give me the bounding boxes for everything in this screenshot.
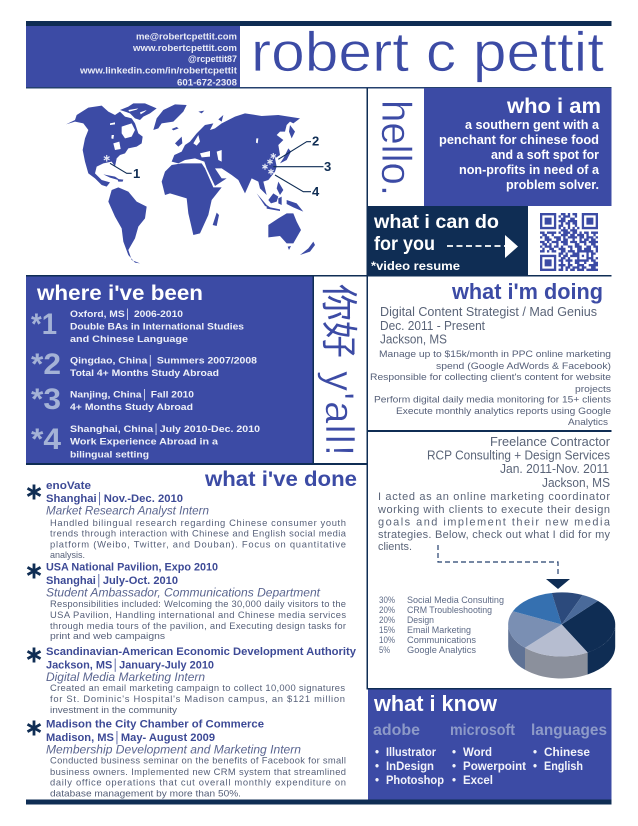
heading: where i've been	[36, 282, 203, 305]
entry: enoVate: Handled bilingual research regarding Chinese consumer youth	[50, 517, 346, 528]
heading	[373, 212, 499, 255]
bio text	[439, 118, 600, 192]
responsibilities: Analytics	[568, 416, 608, 427]
bio text: a southern gent with a	[465, 118, 600, 132]
skill column: microsoft: •	[452, 775, 456, 787]
stop 1: and Chinese Language	[70, 334, 188, 345]
vertical greeting: y'all!	[317, 371, 361, 456]
entry: USA National Pavilion: USA Pavilion, Handling international and Chinese media services	[50, 609, 346, 620]
skill column: languages: English	[544, 761, 583, 773]
skill column: adobe	[373, 722, 444, 787]
vertical greeting: 你好	[318, 284, 359, 358]
entry: enoVate: analysis.	[50, 549, 85, 560]
video resume note: *video resume	[371, 259, 460, 273]
dashed connector arrow	[438, 545, 570, 589]
entry: Madison Chamber	[28, 718, 346, 798]
skill column: microsoft: Powerpoint	[463, 761, 526, 773]
stop 2: Qingdao, China│ Summers 2007/2008	[70, 354, 257, 366]
pie legend: 10%	[379, 635, 395, 645]
contact lines: 601-672-2308	[177, 78, 237, 88]
entry: Madison Chamber: Madison the City Chamber of Commerce	[46, 718, 264, 730]
pie legend	[379, 595, 504, 655]
entry: Scandinavian-American: Digital Media Marketing Intern	[46, 672, 205, 684]
entry: USA National Pavilion: Student Ambassador, Communications Department	[46, 588, 321, 600]
entry: Scandinavian-American: for St. Dominic's Hospital's Madison campus, an $121 million	[50, 693, 345, 704]
bio text: penchant for chinese food	[439, 133, 599, 147]
pie legend: 5%	[379, 645, 390, 655]
entry: Madison Chamber: business owners. Implemented new CRM system that streamlined	[50, 766, 346, 777]
eurasia, africa and oceania	[162, 111, 315, 255]
skill column: microsoft: •	[452, 747, 456, 759]
stop 1: Oxford, MS│ 2006-2010	[70, 308, 183, 320]
role: Jackson, MS	[380, 332, 447, 346]
contact lines	[79, 32, 238, 88]
bio text: non-profits in need of a	[459, 163, 600, 177]
QR code	[540, 214, 598, 270]
pie legend: 20%	[379, 615, 395, 625]
stop 3: *3	[31, 383, 61, 416]
skill column: languages: Chinese	[544, 747, 590, 759]
heading: what i'm doing	[451, 279, 603, 304]
panel: what i can do	[368, 206, 528, 275]
responsibilities: Execute monthly analytics reports using Google	[396, 405, 611, 416]
responsibilities: Responsible for collecting client's content for website	[370, 371, 611, 382]
contact lines: www.robertcpettit.com	[132, 43, 237, 54]
entry: Madison Chamber: Madison, MS│May- August 2009	[46, 730, 215, 745]
role	[380, 305, 597, 346]
pie legend: CRM Troubleshooting	[407, 605, 492, 615]
heading: what i can do	[373, 212, 499, 233]
skill column: adobe: Illustrator	[386, 747, 436, 759]
entry: USA National Pavilion: through media tours of the pavilion, and Executing design tasks for	[50, 620, 346, 631]
location stars	[104, 153, 276, 175]
title: robert c pettit	[251, 20, 604, 83]
role: Jan. 2011-Nov. 2011	[500, 462, 609, 476]
heading: what i know	[373, 691, 498, 716]
panel: what i know	[368, 690, 612, 800]
leader lines and numbers: 4	[312, 184, 320, 199]
pie legend: Social Media Consulting	[407, 595, 504, 605]
entry: enoVate: enoVate	[46, 480, 91, 492]
role: Freelance Contractor	[490, 435, 610, 449]
stop 1: Double BAs in International Studies	[70, 322, 244, 332]
panel: what i'm doing	[370, 279, 611, 427]
stop 4: Work Experience Abroad in a	[70, 436, 219, 448]
pie legend: Design	[407, 615, 434, 625]
responsibilities: spend (Google AdWords & Facebook)	[436, 360, 611, 371]
entry: enoVate: platform (Weibo, Twitter, and Douban). Focus on quantitative	[50, 538, 346, 550]
panel: where i've been	[26, 276, 366, 465]
world map	[66, 103, 331, 263]
skill column: languages: •	[533, 747, 537, 759]
role: Digital Content Strategist / Mad Genius	[380, 305, 597, 319]
pie legend: Communications	[407, 635, 476, 645]
contact lines: @rcpettit87	[188, 54, 237, 65]
stop 2: Total 4+ Months Study Abroad	[70, 368, 219, 379]
panel: contact details	[26, 26, 240, 88]
stop 4: Shanghai, China│July 2010-Dec. 2010	[70, 423, 260, 435]
entry: USA National Pavilion: Shanghai│July-Oct. 2010	[46, 573, 178, 588]
stop 1	[31, 308, 244, 345]
entry: enoVate: Market Research Analyst Intern	[46, 506, 209, 518]
role: RCP Consulting + Design Services	[427, 448, 610, 462]
role: Jackson, MS	[542, 476, 610, 490]
skill column: adobe: Photoshop	[386, 775, 444, 787]
description: goals and implement their new media	[378, 516, 611, 528]
skill column: microsoft: •	[452, 761, 456, 773]
entry: USA National Pavilion: print and web campaigns	[50, 630, 165, 641]
entry: enoVate: trends through interaction with Chinese and English social media	[50, 528, 347, 538]
responsibilities: Manage up to $15k/month in PPC online marketing	[379, 348, 611, 359]
role	[427, 435, 610, 490]
heading: who i am: who i am	[506, 95, 601, 118]
entry: USA National Pavilion: USA National Pavilion, Expo 2010	[46, 562, 218, 574]
vertical greeting	[317, 284, 361, 456]
role: Dec. 2011 - Present	[380, 319, 485, 333]
pie legend: 15%	[379, 625, 395, 635]
responsibilities: Perform digital daily media monitoring for 15+ clients	[374, 394, 611, 404]
stop 1: *1	[31, 308, 57, 341]
vertical hello.: hello.	[373, 100, 420, 196]
skill column: adobe: InDesign	[386, 761, 434, 773]
stop 3: Nanjing, China│ Fall 2010	[70, 388, 194, 400]
pie legend: Google Analytics	[407, 645, 476, 655]
pie chart	[508, 592, 615, 679]
skill column: microsoft	[450, 722, 526, 787]
entry: Madison Chamber: Conducted business seminar on the benefits of Facebook for small	[50, 754, 346, 766]
americas and greenland	[66, 103, 187, 263]
entry: enoVate: Shanghai│Nov.-Dec. 2010	[46, 491, 183, 506]
panel: freelance contractor	[377, 435, 615, 679]
entry: Madison Chamber: Membership Development and Marketing Intern	[46, 744, 301, 756]
entry: Scandinavian-American: Created an email marketing campaign to collect 10,000 signatures	[50, 682, 345, 693]
skill column: microsoft: Excel	[463, 775, 493, 787]
skill column: adobe: •	[375, 761, 379, 773]
panel: who i am	[424, 88, 612, 206]
contact lines: me@robertcpettit.com	[136, 32, 237, 42]
heading: what i've done	[204, 468, 357, 491]
description: working with clients to execute their design	[377, 504, 610, 516]
skill column: microsoft: Word	[463, 747, 492, 759]
stop 3: 4+ Months Study Abroad	[70, 402, 193, 413]
stop 3	[31, 383, 194, 416]
entry: USA National Pavilion: Responsibilities included: Welcoming the 30,000 daily visitors to the	[50, 598, 346, 609]
skill column: adobe: •	[375, 747, 379, 759]
dashed arrow	[447, 235, 518, 258]
pie legend: 30%	[379, 595, 395, 605]
leader lines and numbers: 2	[312, 134, 319, 148]
entry: Scandinavian-American: investment in the community	[50, 704, 177, 715]
stop 4	[31, 423, 260, 460]
entry: USA National Pavilion	[28, 562, 346, 641]
responsibilities: projects	[575, 383, 611, 394]
stop 4: bilingual setting	[70, 450, 149, 460]
entry: Scandinavian-American: Scandinavian-American Economic Development Authority	[46, 646, 357, 658]
skill column: languages	[531, 722, 607, 773]
skill column: adobe: •	[375, 775, 379, 787]
bio text: and a soft spot for	[491, 148, 599, 162]
entry: Madison Chamber: daily office operations that cut overall monthly expenditure on	[50, 776, 346, 788]
description: I acted as an online marketing coordinator	[378, 491, 610, 503]
entry: Scandinavian-American: Jackson, MS│January-July 2010	[46, 658, 214, 672]
leader lines and numbers	[110, 134, 331, 199]
pie legend: 20%	[379, 605, 395, 615]
skill column: languages: •	[533, 761, 537, 773]
leader lines and numbers: 3	[324, 159, 331, 174]
panel: what i've done	[28, 468, 357, 798]
responsibilities	[370, 348, 611, 427]
leader lines and numbers: 1	[133, 166, 140, 181]
description: strategies. Below, check out what I did for my	[378, 529, 610, 541]
skill column: adobe: adobe	[373, 722, 420, 739]
description	[377, 491, 611, 553]
entry: enoVate	[28, 480, 347, 560]
stop 2	[31, 348, 257, 381]
stop 2: *2	[31, 348, 61, 381]
stop 4: *4	[31, 423, 61, 456]
heading: for you	[374, 234, 435, 255]
entry: Scandinavian-American	[28, 646, 357, 715]
description: clients.	[378, 541, 412, 553]
skill column: languages: languages	[531, 722, 607, 739]
entry: Madison Chamber: database management by more than 50%.	[50, 788, 241, 798]
bio text: problem solver.	[506, 178, 599, 192]
skill column: microsoft: microsoft	[450, 722, 515, 739]
contact lines: www.linkedin.com/in/robertcpettit	[79, 66, 238, 76]
pie legend: Email Marketing	[407, 625, 471, 635]
